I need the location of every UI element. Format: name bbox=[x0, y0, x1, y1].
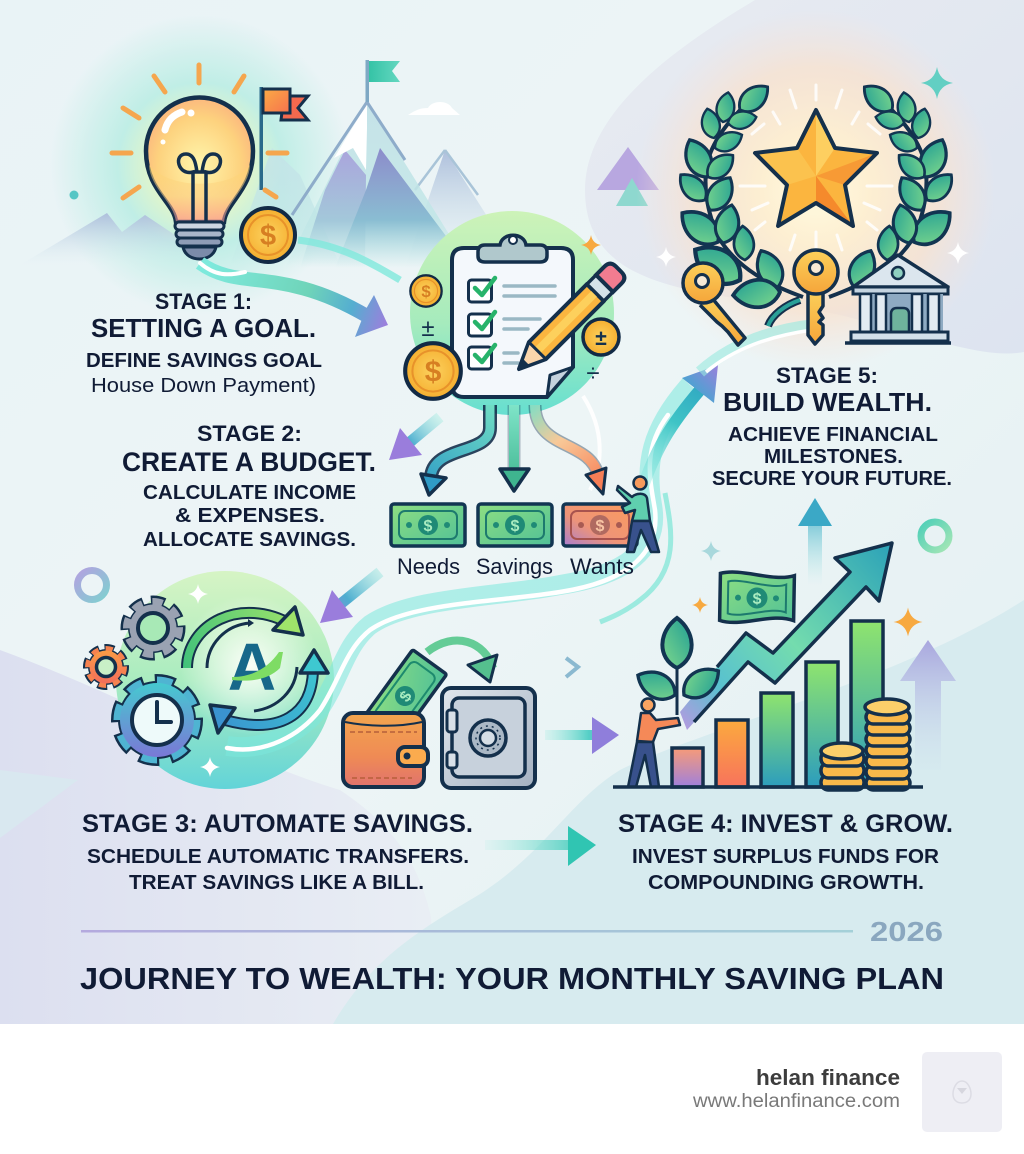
panel: stage 3 automation illustration bbox=[88, 584, 328, 777]
stage 4 text: STAGE 4: INVEST & GROW. bbox=[618, 810, 953, 838]
stage 2 text: STAGE 2: bbox=[197, 421, 302, 446]
sparkle teal bbox=[921, 67, 953, 99]
green circle behind clipboard bbox=[410, 211, 614, 415]
icon: coin with plus minus bbox=[583, 319, 619, 355]
icon: person pushing wants bill bbox=[617, 476, 659, 552]
ring: purple bbox=[78, 570, 106, 600]
arrow: split to savings bbox=[500, 405, 529, 491]
arrow: split to wants bbox=[535, 405, 606, 494]
icon: laurel right bbox=[829, 79, 959, 297]
stage 3 text: STAGE 3: AUTOMATE SAVINGS. bbox=[82, 810, 473, 838]
stage 2 text: ALLOCATE SAVINGS. bbox=[143, 529, 356, 551]
panel: wallet and safe bbox=[343, 641, 535, 788]
bill: savings bbox=[478, 504, 552, 546]
icon: pencil bbox=[511, 261, 627, 377]
sparkle bbox=[581, 235, 601, 255]
brand logo placeholder bbox=[922, 1052, 1002, 1132]
sparkles bbox=[188, 584, 208, 604]
panel: stage 5 achievement illustration bbox=[636, 10, 996, 372]
icon: flowing ring around stage 2 bbox=[583, 396, 600, 490]
bill: wants bbox=[563, 504, 637, 546]
arrow: stage 3 to stage 4 lower bbox=[485, 826, 596, 866]
icon: safe bbox=[442, 688, 535, 788]
footer band bbox=[0, 1024, 1024, 1154]
panel: stage 4 growth chart bbox=[613, 498, 956, 790]
stage 1 text: SETTING A GOAL. bbox=[91, 313, 316, 343]
stage 5 text: MILESTONES. bbox=[764, 446, 903, 468]
decorative glow behind stage 1 bbox=[50, 15, 350, 315]
stage 3 text: TREAT SAVINGS LIKE A BILL. bbox=[129, 872, 424, 894]
curved arrow to safe bbox=[427, 641, 497, 682]
teal dot bbox=[70, 190, 78, 200]
stage 2 text: CREATE A BUDGET. bbox=[122, 447, 376, 477]
sparkles bbox=[701, 541, 721, 561]
budget labels: Savings bbox=[476, 554, 553, 579]
icon: floating bill bbox=[720, 572, 794, 623]
panel: stage 2 budget illustration bbox=[405, 211, 627, 490]
arrow: split to needs bbox=[421, 405, 490, 495]
bill: needs bbox=[391, 504, 465, 546]
green swoosh through A bbox=[232, 652, 283, 681]
icon: tilted key bbox=[683, 263, 745, 345]
budget labels bbox=[397, 554, 634, 579]
icon: bank bbox=[845, 255, 951, 343]
arrow: stage 2 to stage 5 bbox=[640, 365, 718, 495]
icon: cloud bbox=[408, 102, 460, 115]
stream path: flowing ribbon across the page bbox=[227, 385, 690, 749]
icon: blue cycle arrow bbox=[210, 650, 328, 733]
icon: laurel left bbox=[673, 79, 803, 326]
icon: coin with plus minus: ± bbox=[595, 327, 607, 350]
icon: bill entering wallet bbox=[363, 650, 447, 742]
sparkle white left bbox=[656, 247, 676, 267]
icon: orange gear bbox=[88, 649, 124, 685]
arrow: rising zigzag bbox=[680, 543, 892, 730]
icon: wallet bbox=[343, 713, 428, 787]
bill: wants: $ bbox=[596, 518, 605, 535]
arrow: stage 3 to stage 4 upper bbox=[545, 717, 619, 754]
money bills row bbox=[391, 504, 637, 546]
stage 2 text bbox=[122, 421, 376, 551]
division sign: ÷ bbox=[586, 360, 600, 387]
stage 4 text: COMPOUNDING GROWTH. bbox=[648, 872, 924, 894]
ribbon swoosh under keys bbox=[700, 325, 815, 372]
stage 2 text: & EXPENSES. bbox=[175, 505, 325, 527]
stage 1 text bbox=[86, 289, 322, 397]
icon: small coin bbox=[410, 275, 442, 307]
icon: plant bbox=[632, 618, 725, 715]
stage 5 text: STAGE 5: bbox=[776, 363, 878, 388]
icon: flag beside bulb bbox=[260, 87, 308, 190]
stage 3 text bbox=[82, 810, 473, 894]
icon: light bulb bbox=[112, 65, 287, 259]
icon: star bbox=[755, 110, 877, 226]
icon: person with plant bbox=[628, 698, 680, 787]
rays bbox=[740, 85, 892, 250]
icon: clock gear bbox=[118, 681, 196, 759]
stage 1 text: STAGE 1: bbox=[155, 289, 252, 314]
budget labels: Needs bbox=[397, 554, 460, 579]
icon: gold coin bbox=[241, 208, 295, 262]
sparkle white right bbox=[947, 242, 969, 264]
arrow: stage 2 to stage 3 bbox=[320, 572, 380, 623]
stage 5 text: SECURE YOUR FUTURE. bbox=[712, 468, 952, 490]
chart baseline bbox=[613, 785, 923, 789]
stage 5 text: BUILD WEALTH. bbox=[723, 387, 932, 417]
icon: gray gear bbox=[128, 603, 178, 653]
arrow: stage 2 to text bbox=[389, 417, 440, 460]
icon: bill entering wallet: $ bbox=[397, 688, 416, 705]
brand url: www.helanfinance.com bbox=[692, 1091, 900, 1112]
arrow: up background bbox=[900, 640, 956, 770]
coin stacks bbox=[821, 699, 910, 790]
stage 4 text: INVEST SURPLUS FUNDS FOR bbox=[632, 846, 940, 868]
icon: green cycle arrow bbox=[187, 607, 303, 668]
icon: mountains with flag bbox=[20, 60, 520, 268]
bars bbox=[672, 621, 883, 787]
rule line bbox=[81, 930, 853, 932]
brand name: helan finance bbox=[756, 1065, 900, 1090]
triangles decoration bbox=[597, 147, 659, 206]
automation letter A: A bbox=[228, 630, 276, 705]
stage 3 text: SCHEDULE AUTOMATIC TRANSFERS. bbox=[87, 846, 469, 868]
icon: upright key bbox=[794, 250, 838, 344]
year: 2026 bbox=[870, 916, 943, 947]
ring: teal bbox=[921, 522, 949, 550]
stage 5 text bbox=[712, 363, 952, 490]
stage 4 text bbox=[618, 810, 953, 894]
stage 1 text: DEFINE SAVINGS GOAL bbox=[86, 350, 322, 372]
plus minus sign: ± bbox=[421, 315, 435, 342]
icon: large coin bbox=[405, 343, 461, 399]
stage 2 text: CALCULATE INCOME bbox=[143, 482, 356, 504]
small chevron bbox=[566, 658, 578, 677]
stage 5 text: ACHIEVE FINANCIAL bbox=[728, 424, 938, 446]
green circle behind automation icons bbox=[116, 571, 334, 789]
stage 1 text: House Down Payment) bbox=[91, 375, 316, 397]
icon: clipboard checklist bbox=[452, 235, 573, 397]
icon: floating bill: $ bbox=[752, 591, 762, 608]
arrow: stage 1 to stage 2 bbox=[200, 240, 400, 337]
title: JOURNEY TO WEALTH: YOUR MONTHLY SAVING PLAN bbox=[80, 961, 944, 996]
arrow: up to stage 5 bbox=[798, 498, 832, 585]
budget labels: Wants bbox=[570, 554, 634, 579]
warm glow bbox=[636, 10, 996, 370]
